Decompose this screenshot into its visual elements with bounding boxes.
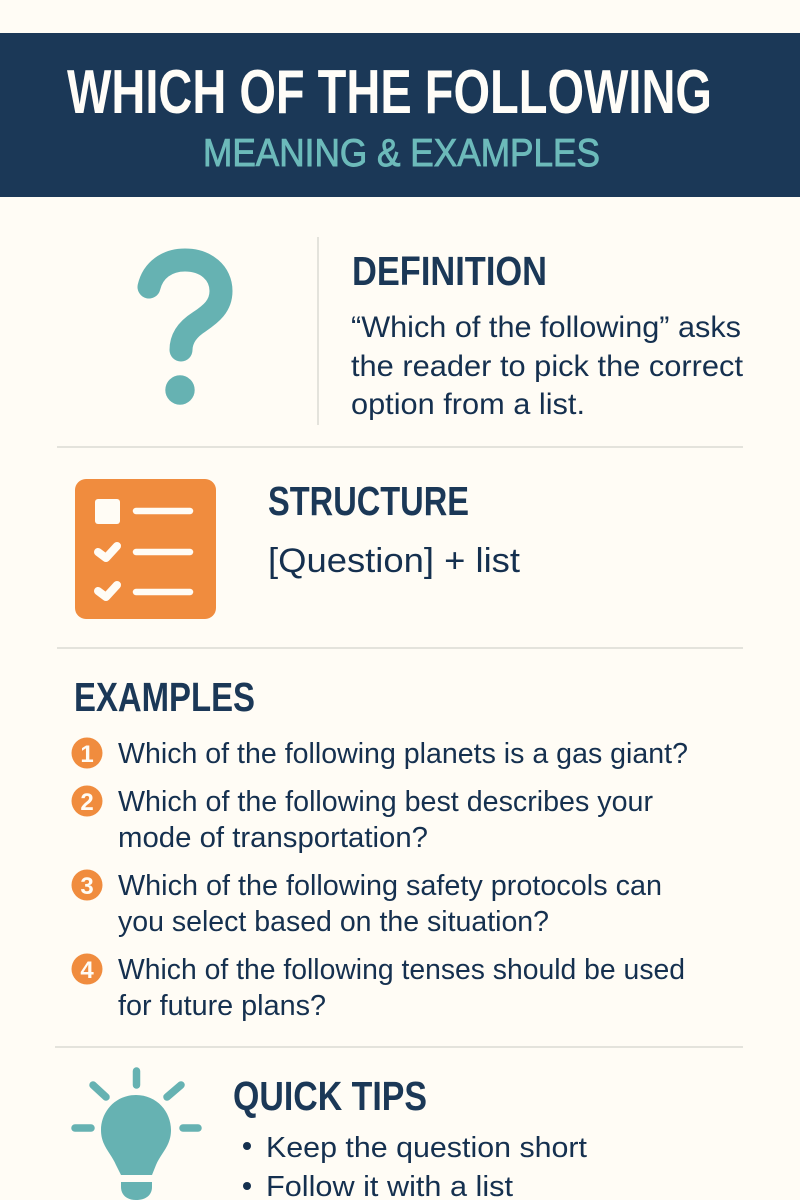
icon: checklist bbox=[75, 479, 216, 619]
example 2 bbox=[72, 786, 653, 854]
tips list: Keep the question short bbox=[266, 1132, 587, 1164]
example 2: 2 bbox=[80, 789, 94, 816]
icon: question mark bbox=[149, 260, 221, 405]
tips list bbox=[243, 1132, 587, 1200]
header banner bbox=[0, 33, 800, 197]
example 3: you select based on the situation? bbox=[118, 906, 549, 938]
example 3: 3 bbox=[80, 873, 94, 900]
example 2: mode of transportation? bbox=[118, 822, 428, 854]
definition text: the reader to pick the correct bbox=[351, 350, 744, 383]
structure formula: [Question] + list bbox=[268, 542, 521, 580]
definition text: “Which of the following” asks bbox=[351, 311, 741, 344]
example 4: 4 bbox=[80, 957, 94, 984]
definition text bbox=[351, 311, 744, 421]
icon: light bulb bbox=[75, 1071, 198, 1200]
example 3 bbox=[72, 870, 662, 938]
example 1: 1 bbox=[80, 741, 94, 768]
example 4: for future plans? bbox=[118, 990, 326, 1022]
example 1: Which of the following planets is a gas giant? bbox=[118, 738, 688, 770]
panel: structure bbox=[75, 478, 521, 619]
example 4 bbox=[72, 954, 685, 1022]
heading: definition: DEFINITION bbox=[352, 248, 547, 294]
panel: quick tips bbox=[75, 1071, 587, 1200]
subtitle: MEANING & EXAMPLES bbox=[203, 132, 600, 175]
heading: examples: EXAMPLES bbox=[74, 674, 255, 720]
panel: examples bbox=[72, 674, 688, 1022]
panel: definition bbox=[149, 237, 744, 425]
example 2: Which of the following best describes your bbox=[118, 786, 653, 818]
example 3: Which of the following safety protocols can bbox=[118, 870, 662, 902]
definition text: option from a list. bbox=[351, 388, 585, 421]
heading: structure: STRUCTURE bbox=[268, 478, 469, 524]
heading: quick tips: QUICK TIPS bbox=[233, 1073, 427, 1119]
example 4: Which of the following tenses should be used bbox=[118, 954, 685, 986]
